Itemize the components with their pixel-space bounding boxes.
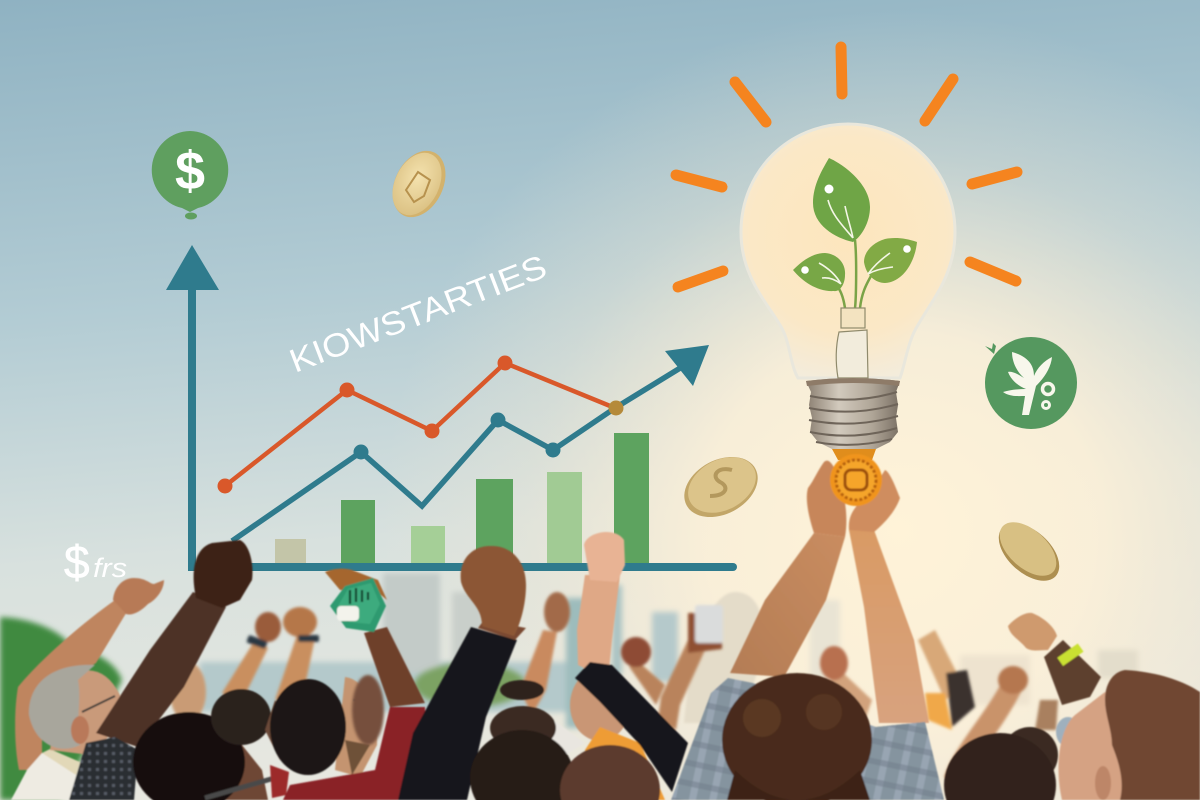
orange coin: [830, 454, 882, 506]
coin right: [988, 512, 1070, 592]
woman's forearm with wristband: [1008, 613, 1101, 705]
badge arm and fist: [325, 569, 425, 707]
man curly hair, red shirt: [270, 675, 425, 800]
lightbulb: [741, 124, 955, 460]
woman dark hair right: [944, 727, 1058, 800]
grey man's raised arm: [15, 578, 164, 770]
middle raised arm: [577, 532, 625, 680]
x axis: [188, 563, 737, 571]
background raised arms: [222, 592, 1058, 790]
man grey hair: [11, 665, 120, 800]
black sleeve right of centre: [575, 662, 688, 792]
plant in bulb: [793, 158, 917, 378]
bulb glass: [741, 124, 955, 378]
icon: green badge: [330, 578, 386, 632]
plaid sleeve: [69, 737, 138, 800]
crowd: [11, 454, 1200, 800]
black sleeve arm and fist: [398, 546, 526, 800]
coin mid: [674, 445, 768, 529]
coin top: [382, 142, 456, 226]
city skyline: [200, 573, 1138, 728]
man with plaid shirt and curly hair: [671, 673, 944, 800]
chart: growth graph: [166, 245, 737, 571]
round shield behind crowd: [684, 592, 765, 723]
dark raised arm and fist: [96, 540, 252, 747]
central raised arms with coin: [730, 461, 929, 723]
bars: [275, 433, 649, 563]
icon: green plant circle: [985, 337, 1077, 429]
people in centre: [470, 669, 665, 800]
man profile right: [1058, 670, 1200, 800]
small dollar label: frs: [93, 553, 127, 583]
blond head behind: [170, 662, 206, 722]
orange trend line: [218, 356, 624, 494]
icon: dollar pin: $: [175, 141, 205, 201]
small dollar label: $: [64, 536, 90, 588]
light rays: [676, 47, 1017, 287]
blue button: [1056, 717, 1080, 747]
icon: dollar pin: [152, 131, 228, 220]
dark hair person behind: [211, 689, 290, 760]
y axis arrow: [166, 245, 219, 571]
chart label: KIOWSTARTIES: [284, 248, 551, 380]
trees: [0, 617, 526, 800]
small dollar label: [64, 536, 127, 588]
man dark hair with glasses: [133, 712, 289, 800]
screw base: [806, 378, 900, 460]
teal trend line: [232, 345, 709, 541]
